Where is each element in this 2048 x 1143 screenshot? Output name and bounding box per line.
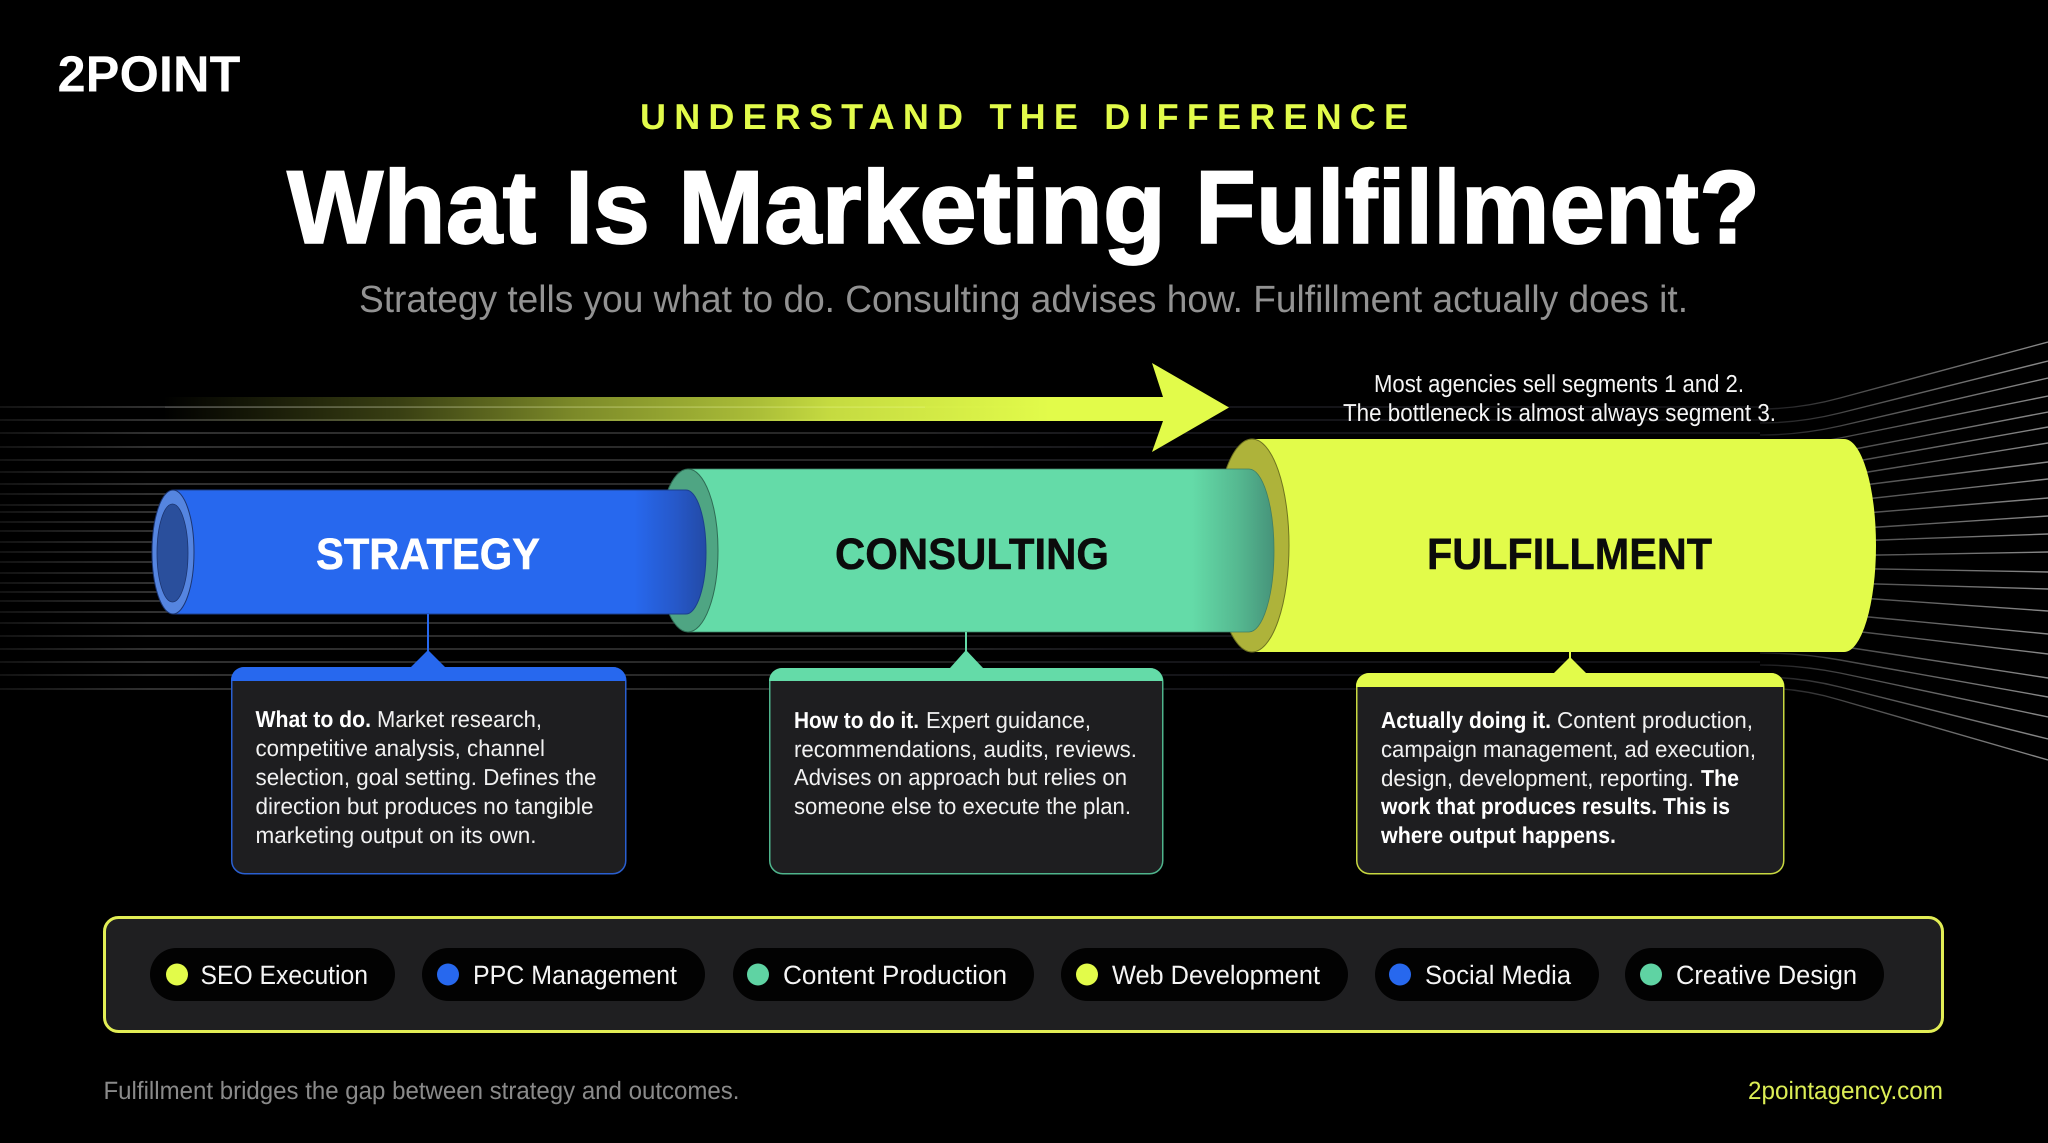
panel: fulfillment description: design, development, reporting.	[1381, 765, 1694, 791]
logo: 2POINT	[58, 46, 240, 102]
pill: Content Production: Content Production	[783, 960, 1007, 990]
subtitle: Strategy tells you what to do. Consulting advises how. Fulfillment actually does it.	[359, 279, 1688, 321]
panel: fulfillment description: Actually doing it.	[1381, 707, 1551, 733]
arrow	[163, 363, 1229, 452]
tube segment: consulting: CONSULTING	[835, 530, 1109, 579]
pill: Creative Design	[1625, 948, 1884, 1001]
pill: Web Development	[1061, 948, 1348, 1001]
footer tagline: Fulfillment bridges the gap between strategy and outcomes.	[104, 1077, 740, 1105]
pill: Web Development: Web Development	[1112, 960, 1321, 990]
pill: Social Media	[1375, 948, 1599, 1001]
pill: SEO Execution	[150, 948, 395, 1001]
annotation note: The bottleneck is almost always segment 3.	[1343, 400, 1776, 427]
panel: fulfillment description: The	[1701, 765, 1739, 791]
title	[287, 150, 1760, 266]
panel: consulting description: someone else to execute the plan.	[794, 793, 1131, 819]
pill: Social Media: Social Media	[1425, 960, 1571, 990]
tube segment: strategy: STRATEGY	[316, 530, 540, 579]
footer website: 2pointagency.com	[1748, 1077, 1943, 1105]
pill: SEO Execution: SEO Execution	[200, 960, 368, 990]
panel: consulting description: recommendations, audits, reviews.	[794, 736, 1137, 762]
panel: fulfillment description: Content production,	[1557, 707, 1753, 733]
pill: Creative Design: Creative Design	[1676, 960, 1857, 990]
tube segment: fulfillment: FULFILLMENT	[1427, 530, 1712, 579]
tube segment: fulfillment	[1215, 439, 1876, 652]
panel: consulting description	[769, 632, 1163, 874]
panel: strategy description: What to do.	[256, 706, 371, 732]
panel: strategy description: marketing output on its own.	[256, 822, 536, 848]
panel: strategy description	[231, 614, 626, 874]
title: Marketing	[678, 150, 1166, 266]
panel: consulting description: How to do it.	[794, 707, 919, 733]
panel: strategy description: Market research,	[377, 706, 542, 732]
panel: strategy description: direction but produces no tangible	[256, 793, 594, 819]
title: Fulfillment?	[1195, 150, 1760, 266]
tube segment: strategy	[152, 490, 706, 614]
panel: strategy description: selection, goal setting. Defines the	[256, 764, 596, 790]
pill: Content Production	[733, 948, 1034, 1001]
annotation note	[1343, 371, 1776, 427]
annotation note: Most agencies sell segments 1 and 2.	[1374, 371, 1744, 398]
eyebrow heading: UNDERSTAND THE DIFFERENCE	[640, 96, 1408, 137]
pill: PPC Management	[422, 948, 705, 1001]
tube segment: consulting	[658, 469, 1274, 632]
panel: consulting description: Expert guidance,	[926, 707, 1091, 733]
panel: consulting description: Advises on approach but relies on	[794, 764, 1127, 790]
panel: fulfillment description: where output happens.	[1380, 822, 1616, 848]
title: What Is	[287, 150, 650, 266]
panel: fulfillment description: work that produces results. This is	[1380, 793, 1730, 819]
panel: fulfillment description	[1356, 652, 1784, 874]
pill: PPC Management: PPC Management	[473, 960, 678, 990]
panel: strategy description: competitive analysis, channel	[256, 735, 545, 761]
panel: fulfillment description: campaign management, ad execution,	[1381, 736, 1756, 762]
panel: services bar	[104, 918, 1942, 1032]
